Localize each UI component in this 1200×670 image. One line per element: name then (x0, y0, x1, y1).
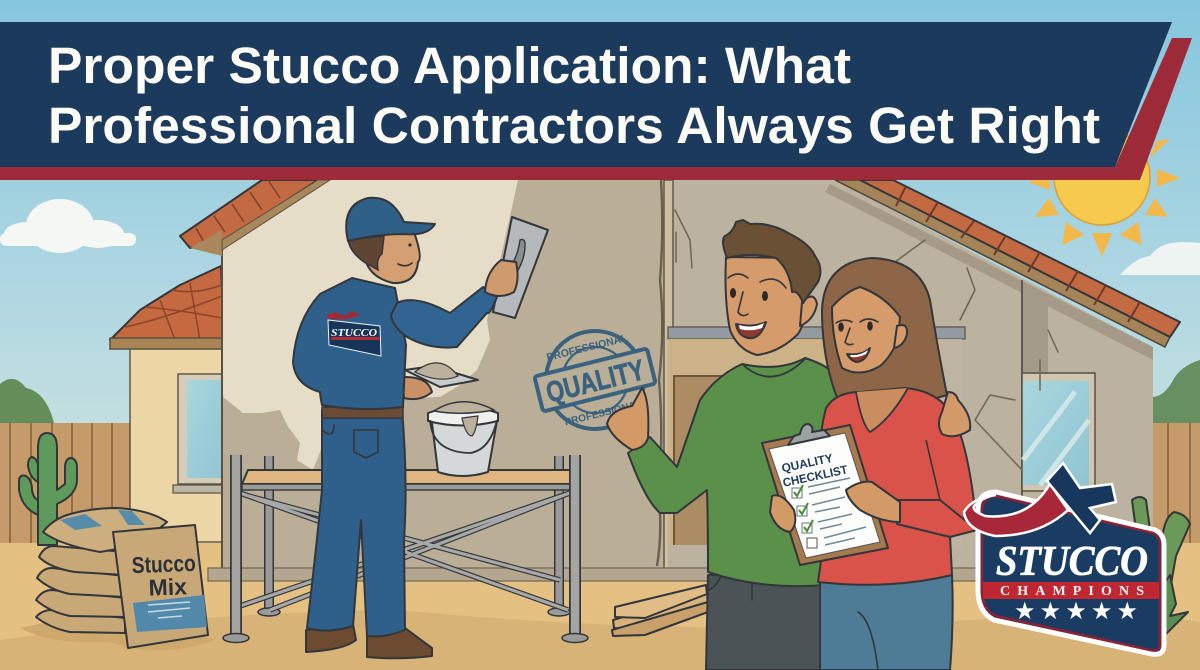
woman's forearm (897, 500, 977, 537)
hand right on clipboard (846, 482, 900, 522)
stamp bar (534, 349, 656, 411)
man hair (723, 220, 820, 303)
sand bags: Mix (148, 573, 188, 601)
banner navy panel (0, 22, 1172, 167)
man thumbs up hand (607, 388, 648, 450)
right cactus (1132, 497, 1190, 634)
cement bag (113, 525, 208, 648)
logo red bar (983, 582, 1159, 599)
quality stamp (527, 318, 663, 442)
jacket logo (326, 311, 381, 356)
right roof tiles (860, 180, 1180, 337)
bucket of stucco (428, 402, 498, 476)
checklist heading: QUALITY (780, 451, 834, 475)
hand left on clipboard (770, 495, 795, 532)
woman hair (822, 258, 947, 400)
logo shield (978, 492, 1164, 654)
logo trowel (1047, 463, 1116, 533)
holding hand with hawk (402, 363, 478, 399)
man face (728, 274, 786, 288)
man head (723, 220, 820, 355)
door (674, 376, 794, 546)
title banner (0, 22, 1192, 180)
right bush (1153, 360, 1200, 423)
icon: sun (1028, 129, 1180, 257)
worker belt (322, 407, 403, 418)
quality stamp: QUALITY (543, 354, 648, 410)
cracks (895, 240, 1058, 470)
banner red accent (0, 38, 1192, 180)
trowel (493, 217, 548, 318)
logo CHAMPIONS word: CHAMPIONS (1000, 584, 1144, 599)
title line 2: Professional Contractors Always Get Right (48, 97, 1100, 154)
platform (242, 470, 572, 484)
porch beam (668, 327, 965, 339)
icon: left cactus (19, 433, 77, 545)
woman red top (818, 388, 977, 585)
clipboard clip (788, 424, 830, 445)
logo stars: ★★★★★ (1014, 597, 1138, 625)
homeowner woman (818, 258, 977, 670)
checklist rows (792, 478, 866, 548)
centre crack (657, 180, 662, 566)
worker torso (293, 278, 406, 409)
icon: left cloud (0, 199, 136, 253)
lumber planks (612, 585, 708, 636)
back house roof (110, 266, 224, 340)
stucco worker (293, 198, 548, 658)
woman head (832, 287, 907, 373)
right house wall (657, 180, 1180, 572)
man's hand on her shoulder (939, 392, 970, 436)
worker pants (307, 410, 406, 636)
quality stamp: PROFESSIONAL (564, 399, 643, 428)
stucco champions logo (964, 463, 1164, 654)
left house wall (180, 180, 668, 572)
crossbars (240, 492, 572, 610)
right window (1022, 373, 1095, 491)
scaffold (223, 455, 588, 642)
jacket logo: STUCCO (331, 327, 377, 339)
man sweater (628, 358, 838, 586)
right side wall shade (1022, 283, 1048, 373)
worker head (346, 198, 435, 283)
woman jeans (820, 575, 953, 670)
icon: right cloud (1120, 242, 1200, 275)
left fence (0, 379, 130, 545)
worker boots (306, 624, 432, 658)
worker raised arm (391, 287, 497, 348)
sand bags (20, 508, 215, 651)
quality checklist clipboard (762, 424, 977, 565)
vertical centre joint (664, 180, 673, 572)
quality stamp: PROFESSIONAL (545, 332, 629, 364)
back house window (178, 374, 224, 484)
right fascia (835, 180, 1170, 347)
worker cap (346, 198, 435, 241)
title line 1: Proper Stucco Application: What (48, 37, 851, 94)
left bush (0, 379, 54, 423)
small back house (110, 266, 224, 542)
shadow below right fascia (825, 184, 1153, 360)
logo STUCCO word: STUCCO (996, 539, 1148, 585)
man pants (706, 575, 826, 670)
checklist subheading: CHECKLIST (781, 462, 850, 490)
wall base strip (208, 568, 1013, 581)
sand bags: Stucco (131, 550, 196, 578)
left roof (180, 180, 318, 248)
homeowner man (607, 220, 838, 670)
logo swoosh (964, 484, 1068, 536)
right fence (1153, 423, 1200, 543)
worker hand (485, 260, 518, 296)
fresh stucco area (221, 180, 518, 470)
porch frame (668, 339, 950, 545)
ground (0, 543, 1200, 670)
